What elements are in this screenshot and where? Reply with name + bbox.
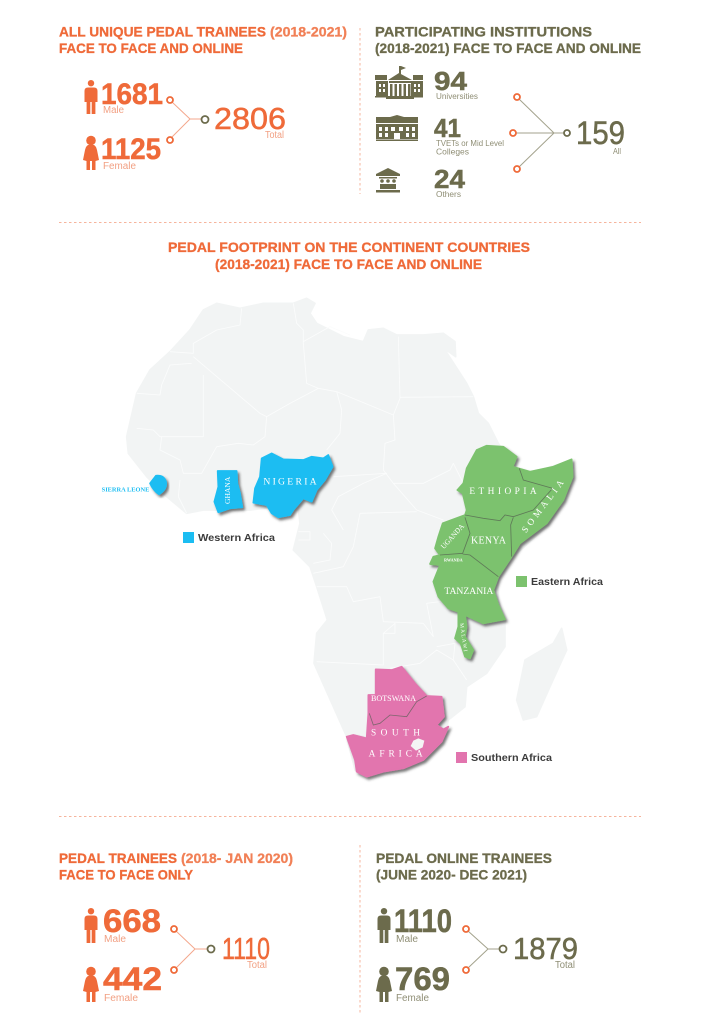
female label: Female — [396, 993, 429, 1004]
label: Ghana: GHANA — [223, 476, 232, 504]
heading: all unique trainees: (2018-2021) — [270, 24, 347, 40]
Nigeria — [253, 453, 333, 517]
label: Tanzania: TANZANIA — [444, 586, 493, 597]
label: Kenya: KENYA — [471, 535, 507, 546]
label: Sierra Leone: SIERRA LEONE — [102, 487, 149, 493]
label: Uganda: UGANDA — [439, 521, 466, 551]
Sierra Leone — [150, 476, 166, 494]
heading: all unique trainees — [59, 24, 347, 56]
heading: footprint: PEDAL FOOTPRINT ON THE CONTINENT COUNTRIES — [168, 239, 530, 255]
label: Botswana: BOTSWANA — [371, 694, 416, 703]
male label: Male — [396, 934, 418, 945]
heading: face to face trainees: FACE TO FACE ONLY — [59, 866, 194, 882]
connector — [510, 94, 570, 172]
heading: face to face trainees: PEDAL TRAINEES — [59, 850, 177, 866]
label: South: SOUTH — [371, 729, 420, 739]
heading: all unique trainees: ALL UNIQUE PEDAL TRAINEES — [59, 24, 266, 40]
heading: online trainees — [376, 850, 552, 882]
icon: other institutions — [376, 168, 400, 192]
universities count: 94 — [434, 66, 468, 96]
label: Nigeria: NIGERIA — [263, 477, 317, 488]
female count: 1125 — [101, 133, 161, 166]
heading: face to face trainees — [59, 850, 293, 882]
male label: Male — [103, 105, 124, 116]
connector — [171, 926, 214, 973]
heading: online trainees: (JUNE 2020- DEC 2021) — [376, 866, 527, 882]
heading: footprint — [168, 239, 530, 272]
heading: face to face trainees: (2018- JAN 2020) — [181, 850, 293, 866]
total count: 2806 — [214, 101, 286, 136]
icon: female figure — [83, 136, 99, 170]
connector — [167, 97, 208, 143]
label: Rwanda: RWANDA — [444, 557, 463, 562]
others count: 24 — [434, 164, 466, 194]
icon: female figure — [376, 967, 392, 1002]
icon: female figure — [83, 967, 99, 1002]
icon: male figure — [378, 908, 390, 943]
legend: Southern Africa: Southern Africa — [471, 752, 552, 764]
TVET label — [436, 138, 504, 156]
male count: 1110 — [394, 903, 452, 939]
icon: male figure — [84, 80, 98, 114]
connector — [463, 926, 506, 973]
female label: Female — [104, 993, 138, 1004]
all count: 159 — [576, 115, 625, 151]
label: Malawi: MALAWI — [458, 623, 468, 652]
total label: Total — [265, 130, 284, 141]
map: Africa — [102, 298, 573, 777]
male label: Male — [104, 934, 126, 945]
heading: participating institutions — [375, 24, 641, 56]
male count: 1681 — [101, 78, 163, 111]
region: Eastern Africa — [430, 446, 573, 658]
total label: Total — [555, 960, 575, 971]
icon: university — [375, 66, 423, 99]
heading: online trainees: PEDAL ONLINE TRAINEES — [376, 850, 552, 866]
TVET label: Colleges — [436, 146, 469, 156]
legend: Eastern Africa: Eastern Africa — [531, 576, 603, 588]
heading: all unique trainees: FACE TO FACE AND ONLINE — [59, 40, 243, 56]
icon: college — [376, 115, 418, 141]
universities label: Universities — [436, 91, 478, 101]
panel: face to face trainees — [59, 850, 293, 1004]
panel: all unique trainees — [59, 24, 347, 172]
region: Western Africa — [102, 453, 333, 517]
total count: 1110 — [222, 931, 270, 966]
icon: male figure — [84, 908, 98, 943]
total label: Total — [247, 960, 267, 971]
male count: 668 — [103, 903, 161, 939]
total count: 1879 — [513, 931, 578, 966]
region: Southern Africa — [347, 667, 448, 777]
heading: participating institutions: PARTICIPATING INSTITUTIONS — [375, 24, 592, 40]
all label: All — [613, 146, 621, 156]
panel: online trainees — [376, 850, 578, 1004]
heading: participating institutions: (2018-2021) FACE TO FACE AND ONLINE — [375, 40, 641, 56]
heading: footprint: (2018-2021) FACE TO FACE AND ONLINE — [215, 256, 482, 272]
female label: Female — [103, 161, 136, 172]
female count: 442 — [103, 961, 162, 997]
Ghana — [214, 471, 242, 512]
Lesotho gap — [411, 738, 424, 751]
continent base — [127, 298, 572, 777]
legend: Western Africa: Western Africa — [198, 532, 275, 544]
label: Africa: AFRICA — [369, 750, 423, 760]
label: Ethiopia: ETHIOPIA — [469, 487, 537, 497]
label: Somalia: SOMALIA — [520, 478, 567, 535]
panel: participating institutions — [375, 24, 641, 199]
female count: 769 — [395, 961, 450, 997]
others label: Others — [436, 189, 461, 199]
TVET count: 41 — [434, 113, 461, 143]
TVET label: TVETs or Mid Level — [436, 138, 504, 148]
